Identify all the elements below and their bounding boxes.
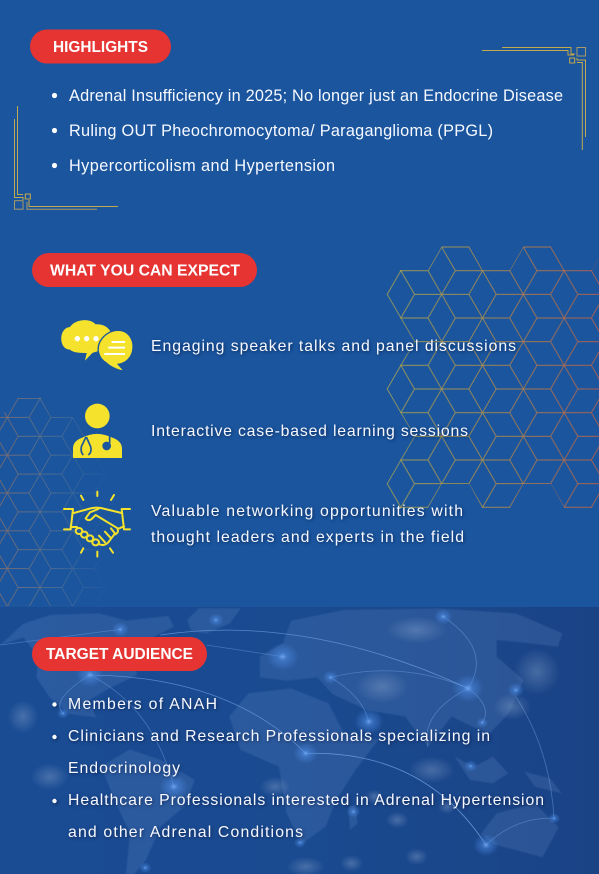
- icon: doctor: [73, 404, 122, 458]
- icon: handshake: [64, 492, 130, 557]
- continents: [0, 608, 562, 874]
- target audience list: [52, 696, 544, 841]
- target audience list: Clinicians and Research Professionals specializing in: [68, 728, 490, 745]
- heading: target audience: [32, 637, 207, 671]
- highlights list: Ruling OUT Pheochromocytoma/ Paraganglioma (PPGL): [69, 122, 493, 140]
- expect items text: thought leaders and experts in the field: [151, 529, 464, 546]
- heading: target audience: TARGET AUDIENCE: [46, 646, 193, 663]
- target audience list: Endocrinology: [68, 760, 180, 777]
- city light haze: [8, 617, 560, 874]
- expect items text: Valuable networking opportunities with: [151, 503, 463, 520]
- world map panel: [0, 607, 599, 874]
- hexagon cube pattern: right: [380, 240, 599, 520]
- heading: highlights: HIGHLIGHTS: [53, 39, 148, 56]
- expect items text: [151, 338, 516, 546]
- heading: highlights: [30, 30, 171, 64]
- target audience list: Members of ANAH: [68, 696, 217, 713]
- decorative gold corner: bottom left: [14, 106, 118, 209]
- network glow nodes: [57, 609, 560, 873]
- highlights list: Adrenal Insufficiency in 2025; No longer just an Endocrine Disease: [69, 87, 563, 105]
- highlights list: Hypercorticolism and Hypertension: [69, 157, 335, 175]
- target audience list: Healthcare Professionals interested in Adrenal Hypertension: [68, 792, 544, 809]
- decorative gold corner: top right: [482, 48, 586, 150]
- target audience list: and other Adrenal Conditions: [68, 824, 303, 841]
- highlights list: [52, 87, 563, 175]
- heading: what you can expect: WHAT YOU CAN EXPECT: [50, 262, 241, 280]
- icon: speech bubbles: [61, 320, 133, 371]
- hexagon cube pattern: left: [0, 398, 101, 606]
- expect items text: Interactive case-based learning sessions: [151, 423, 468, 440]
- arcs: [0, 617, 554, 845]
- expect items text: Engaging speaker talks and panel discussions: [151, 338, 516, 355]
- heading: what you can expect: [32, 253, 257, 287]
